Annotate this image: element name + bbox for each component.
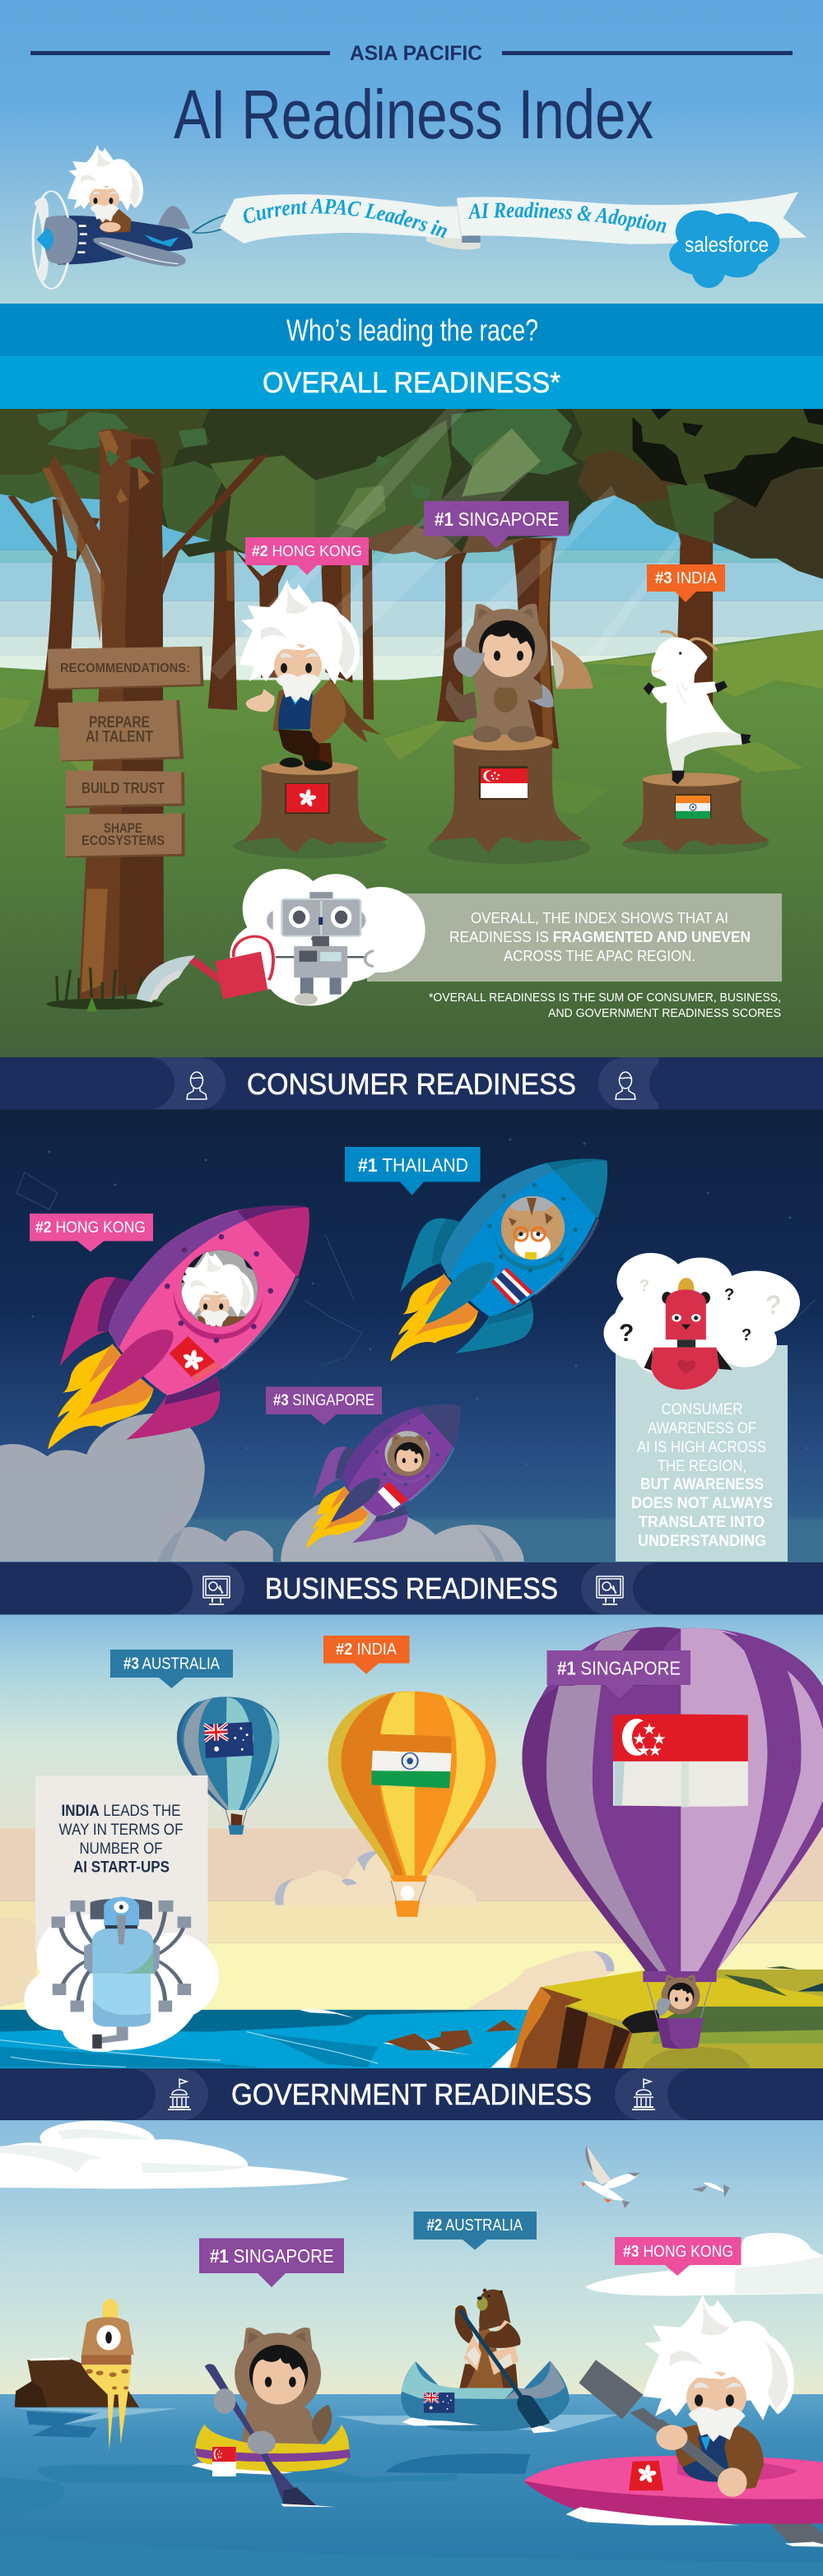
signpost: recommendations: BUILD TRUST (81, 780, 165, 796)
tag: #2 India: #2 INDIA (336, 1641, 398, 1659)
section scene: business readiness balloons (0, 1614, 823, 2068)
kicker: Asia Pacific: ASIA PACIFIC (350, 42, 482, 65)
signpost: recommendations (48, 647, 203, 857)
tag: #3 Hong Kong (615, 2237, 741, 2276)
callout: consumer awareness panel: UNDERSTANDING (638, 1533, 766, 1550)
callout: consumer awareness panel: CONSUMER (662, 1401, 742, 1418)
callout: overall finding panel: OVERALL, THE INDEX SHOWS THAT AI (471, 910, 728, 926)
signpost: recommendations: RECOMMENDATIONS: (60, 661, 190, 675)
subheading band: Who's leading the race? (0, 304, 823, 356)
kicker: Asia Pacific (30, 42, 793, 65)
callout: consumer awareness panel: AI IS HIGH ACROSS (637, 1439, 766, 1456)
tag: #2 Hong Kong: #2 HONG KONG (35, 1219, 146, 1237)
tag: #3 Australia (110, 1650, 233, 1688)
callout: consumer awareness panel: THE REGION, (658, 1458, 746, 1475)
callout: consumer awareness panel: TRANSLATE INTO (639, 1514, 765, 1531)
balloon: India (328, 1692, 496, 1917)
section heading band: Government readiness (0, 2068, 823, 2120)
smoke clouds (0, 1413, 524, 1562)
icon: tiger pilot (500, 1196, 565, 1260)
section heading band: Consumer readiness: CONSUMER READINESS (247, 1067, 576, 1101)
signpost: recommendations: SHAPE (104, 820, 142, 836)
callout: consumer awareness panel (616, 1345, 788, 1562)
callout: consumer awareness panel: DOES NOT ALWAYS (631, 1495, 773, 1512)
callout: consumer awareness panel: AWARENESS OF (648, 1420, 756, 1437)
rocket: Hong Kong (48, 1205, 309, 1450)
tag: #1 Singapore: #1 SINGAPORE (435, 508, 559, 530)
tag: #2 India (323, 1636, 410, 1674)
callout: India start-ups panel: INDIA LEADS THE (61, 1803, 181, 1820)
tag: #3 India (647, 564, 725, 602)
section heading band: Overall readiness: OVERALL READINESS* (263, 367, 560, 399)
section heading band: Business readiness: BUSINESS READINESS (265, 1571, 558, 1605)
stump: India with goat (623, 632, 770, 852)
tag: #2 Hong Kong: #2 HONG KONG (252, 543, 362, 559)
callout: overall finding panel: READINESS IS FRAGMENTED AND UNEVEN (449, 929, 751, 945)
callout: overall finding panel: ACROSS THE APAC REGION. (504, 948, 695, 964)
logo: salesforce cloud (669, 211, 779, 288)
tag: #1 Thailand: #1 THAILAND (358, 1154, 468, 1176)
tag: #3 Singapore (266, 1387, 382, 1425)
tag: #3 Hong Kong: #3 HONG KONG (623, 2243, 733, 2261)
section heading band: Consumer readiness (0, 1057, 823, 1109)
section heading band: Government readiness: GOVERNMENT READINESS (231, 2077, 592, 2111)
boat: Australia bear canoe (401, 2289, 570, 2433)
icon: multi-armed robot in cloud (24, 1897, 219, 2052)
icon: red robot thought cloud: ? (639, 1277, 649, 1295)
section scene: overall readiness forest (0, 409, 823, 1058)
tag: #1 Singapore (424, 501, 569, 549)
section scene: government readiness lake (0, 2120, 823, 2576)
signpost: recommendations: PREPARE (89, 714, 150, 731)
stump: Singapore with Astro (433, 604, 583, 852)
tag: #1 Singapore: #1 SINGAPORE (210, 2245, 334, 2267)
icon: red robot thought cloud: ? (724, 1286, 734, 1304)
section heading band: Overall readiness (0, 356, 823, 409)
header sky background (0, 0, 823, 304)
footnote: overall readiness definition: *OVERALL READINESS IS THE SUM OF CONSUMER, BUSINESS, (429, 991, 781, 1005)
icon: red robot thought cloud: ? (742, 1326, 751, 1344)
icon: red robot thought cloud: ? (765, 1290, 782, 1320)
tag: #1 Thailand (345, 1147, 481, 1195)
tag: #2 Hong Kong (245, 537, 369, 575)
boat: Hong Kong Einstein kayak (524, 2294, 823, 2547)
footnote: overall readiness definition: AND GOVERNMENT READINESS SCORES (548, 1006, 781, 1020)
banner ribbon: AI Readiness & Adoption (467, 202, 667, 233)
illustration: Einstein in plane (33, 145, 233, 289)
banner ribbon (219, 192, 807, 250)
section heading band: Business readiness (0, 1562, 823, 1615)
signpost: recommendations: ECOSYSTEMS (81, 833, 165, 848)
stump: Hong Kong with Einstein (239, 579, 388, 853)
rocket: Singapore (306, 1404, 460, 1548)
tag: #2 Hong Kong (30, 1214, 153, 1252)
goat (644, 632, 751, 784)
callout: overall finding panel (367, 893, 782, 982)
tag: #1 Singapore (199, 2238, 344, 2287)
tag: #1 Singapore (546, 1650, 690, 1698)
callout: India start-ups panel: AI START-UPS (73, 1859, 170, 1876)
tag: #2 Australia (413, 2212, 537, 2250)
footnote: overall readiness definition (429, 991, 781, 1020)
balloon: Australia (177, 1696, 279, 1835)
signpost: recommendations: AI TALENT (86, 729, 153, 745)
callout: India start-ups panel: NUMBER OF (79, 1840, 163, 1858)
tag: #3 India: #3 INDIA (655, 569, 718, 587)
callout: consumer awareness panel: BUT AWARENESS (640, 1476, 764, 1493)
tag: #1 Singapore: #1 SINGAPORE (557, 1657, 681, 1678)
icon: red robot thought cloud: ? (619, 1320, 634, 1347)
callout: India start-ups panel (35, 1775, 207, 1952)
logo: salesforce cloud: salesforce (685, 232, 769, 257)
icon: robot with watering can in cloud (137, 869, 425, 1005)
tag: #3 Singapore: #3 SINGAPORE (273, 1392, 374, 1409)
icon: red robot thought cloud (603, 1253, 800, 1390)
subheading band: Who's leading the race?: Who’s leading the race? (286, 313, 538, 347)
boat: Singapore Astro kayak (192, 2328, 351, 2507)
balloon: Singapore (522, 1627, 823, 2049)
section scene: consumer readiness space (0, 1109, 823, 1562)
tag: #3 Australia: #3 AUSTRALIA (123, 1655, 221, 1673)
title: AI Readiness Index (174, 76, 653, 153)
callout: India start-ups panel: WAY IN TERMS OF (59, 1822, 183, 1839)
rocket: Thailand (391, 1158, 607, 1362)
banner ribbon: Current APAC Leaders in (244, 199, 447, 239)
tag: #2 Australia: #2 AUSTRALIA (426, 2216, 523, 2235)
